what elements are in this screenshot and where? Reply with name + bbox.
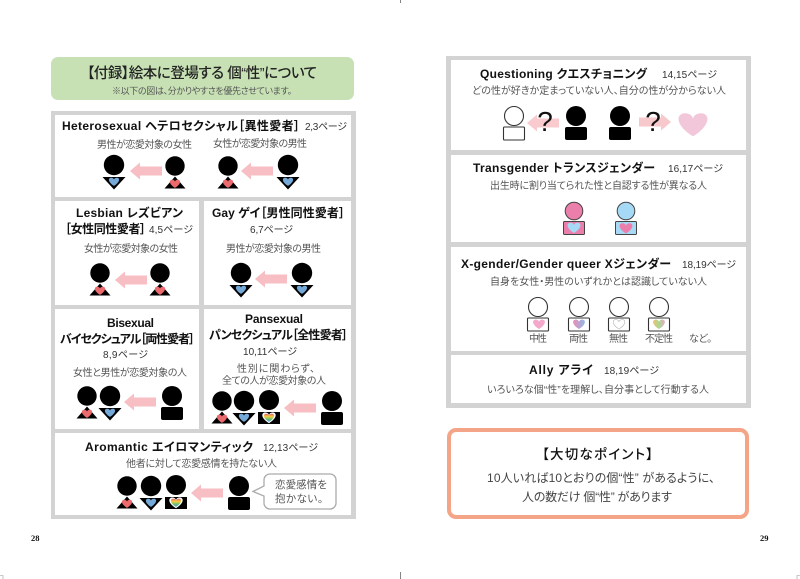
panel: Lesbian [55,201,199,305]
panel: X-gender: 18,19ページ [682,260,736,271]
panel: Transgender: 16,17ページ [668,164,723,175]
panel: Lesbian: ［女性同性愛者］ [65,221,146,236]
left page gray frame [51,111,356,519]
panel: Gay: 男性が恋愛対象の男性 [226,242,321,255]
panel: Transgender: 出生時に割り当てられた性と自認する性が異なる人 [490,179,707,192]
panel: Aromantic: 他者に対して恋愛感情を持たない人 [126,457,277,470]
panel: Ally: Ally アライ [529,363,593,377]
callout: key point: 人の数だけ 個“性” があります [522,489,672,504]
panel: Pansexual: パンセクシュアル［全性愛者］ [209,327,348,342]
panel: X-gender: など。 [689,333,712,345]
panel: Bisexual: Bisexual [107,316,154,330]
panel: Heterosexual: 2,3ページ [305,122,347,133]
panel: Lesbian: 4,5ページ [149,225,193,236]
panel: Transgender: Transgender トランスジェンダー [473,160,655,175]
panel: Pansexual: 性別に関わらず、 [237,362,315,375]
panel: Transgender [451,155,746,242]
panel: X-gender: 不定性 [645,332,673,345]
panel: Heterosexual: Heterosexual ヘテロセクシャル［異性愛者］ [62,118,300,133]
panel: Gay: 6,7ページ [250,225,293,236]
panel: Bisexual: バイセクシュアル［両性愛者］ [60,331,195,346]
panel: Pansexual: Pansexual [245,312,303,326]
panel: X-gender: 両性 [569,332,588,345]
panel: Pansexual: 全ての人が恋愛対象の人 [222,374,326,387]
panel: X-gender: 自身を女性・男性のいずれかとは認識していない人 [490,275,707,288]
panel: Gay: Gay ゲイ［男性同性愛者］ [212,205,345,220]
panel: Ally: いろいろな個“性”を理解し、自分事として行動する人 [487,383,709,396]
page number 28: 28 [31,533,40,543]
panel: Heterosexual [55,115,351,197]
title banner: ※以下の図は、分かりやすさを優先させています。 [112,85,292,96]
panel: Lesbian: 女性が恋愛対象の女性 [84,242,178,255]
panel: Lesbian: Lesbian レズビアン [76,205,183,220]
panel: Questioning: 14,15ページ [662,70,717,81]
callout: key point [449,430,747,517]
panel: Aromantic: Aromantic エイロマンティック [85,440,253,454]
panel: Pansexual: 10,11ページ [243,347,297,358]
panel: Aromantic: 抱かない。 [275,492,323,505]
callout: key point: 【大切なポイント】 [542,447,653,462]
panel: Bisexual [55,309,199,429]
panel: Aromantic: 恋愛感情を [275,478,327,491]
panel: X-gender: 中性 [529,332,547,345]
title banner [51,57,354,100]
panel: X-gender [451,247,746,351]
panel: Ally: 18,19ページ [604,366,659,377]
panel: X-gender: X-gender/Gender queer Xジェンダー [461,256,671,271]
callout: key point: 10人いれば10とおりの個“性” があるように、 [487,470,715,485]
panel: X-gender: 無性 [609,332,628,345]
panel: Heterosexual: 男性が恋愛対象の女性 [97,138,192,151]
panel: Bisexual: 女性と男性が恋愛対象の人 [73,366,187,379]
panel: Questioning: ? [645,106,661,137]
panel: Bisexual: 8,9ページ [103,350,148,361]
panel: Questioning: どの性が好きか定まっていない人、自分の性が分からない人 [472,84,726,97]
panel: Questioning: ? [537,106,553,137]
panel: Aromantic [55,433,351,515]
page number 29: 29 [760,533,768,543]
panel: Questioning: Questioning クエスチョニング [480,66,648,81]
right page gray frame [446,56,751,408]
panel: Heterosexual: 女性が恋愛対象の男性 [213,137,307,150]
panel: Aromantic: 12,13ページ [263,443,318,454]
panel: Questioning [451,60,746,150]
panel: Gay [204,201,351,305]
panel: Ally [451,355,746,403]
panel: Pansexual [204,309,351,429]
title banner: 【付録】絵本に登場する 個“性”について [87,65,317,82]
